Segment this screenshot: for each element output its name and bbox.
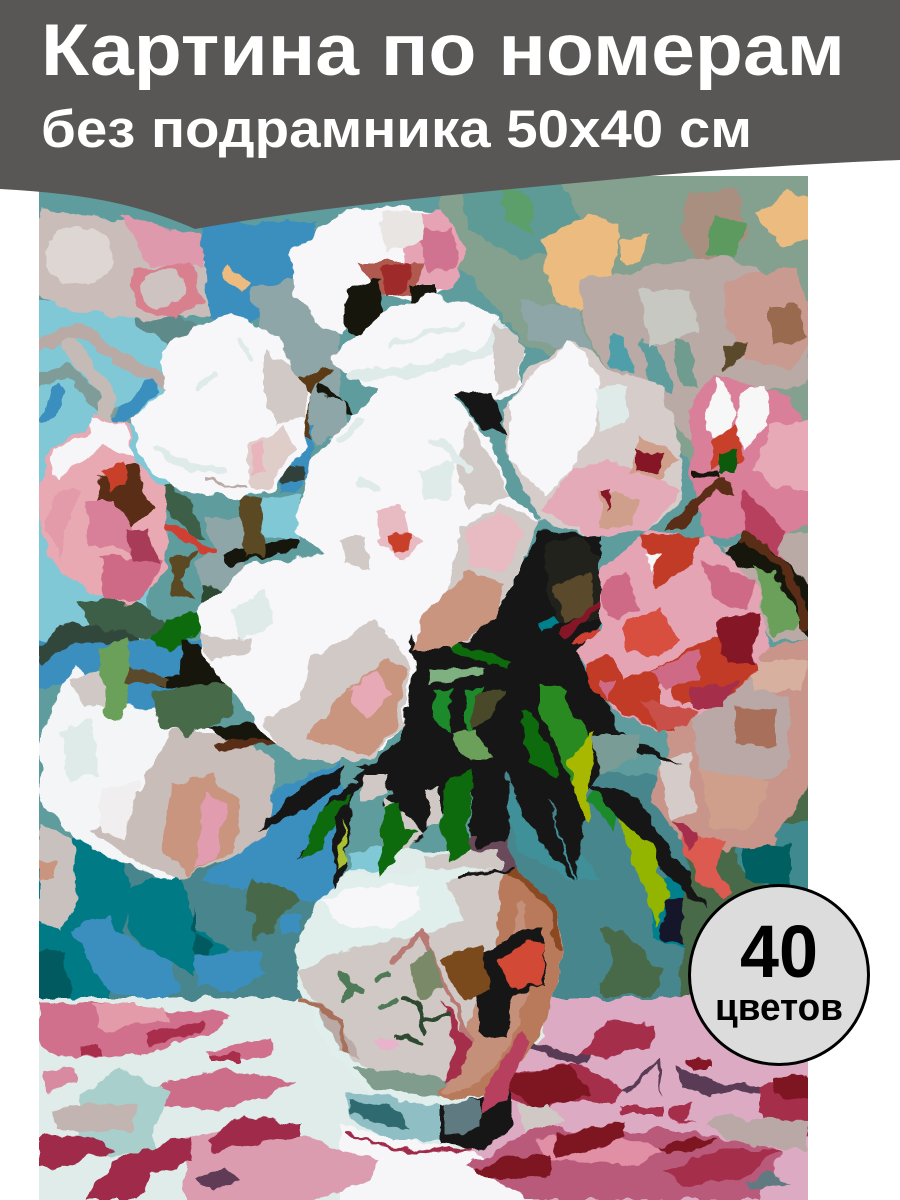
painting: peonies in a vase	[20, 160, 830, 1200]
upper centre white flower	[332, 295, 525, 435]
tan flower right	[650, 640, 815, 900]
title: Картина по номерам	[41, 10, 845, 91]
badge: 40 colours: цветов	[715, 987, 843, 1029]
stems and green leaf right	[722, 537, 810, 640]
central white flower	[295, 385, 540, 650]
left pink flower	[38, 415, 168, 605]
large lower white flower	[197, 555, 415, 760]
leaves over vase neck	[332, 775, 510, 888]
red peony	[577, 530, 767, 730]
top flower	[292, 205, 466, 345]
badge: 40 colours	[690, 886, 868, 1064]
header banner	[0, 0, 900, 229]
table	[20, 998, 830, 1200]
subtitle: без подрамника 50х40 см	[41, 100, 752, 159]
badge: 40 colours: 40	[740, 910, 818, 993]
dark leaves mass	[259, 530, 708, 925]
lower left white flower	[39, 665, 275, 930]
painting background	[20, 160, 830, 1020]
flower far right pink	[665, 372, 815, 560]
vase	[296, 800, 562, 1152]
right pale flower	[503, 340, 683, 535]
white flower upper left	[132, 312, 310, 500]
stems on left	[39, 365, 355, 752]
